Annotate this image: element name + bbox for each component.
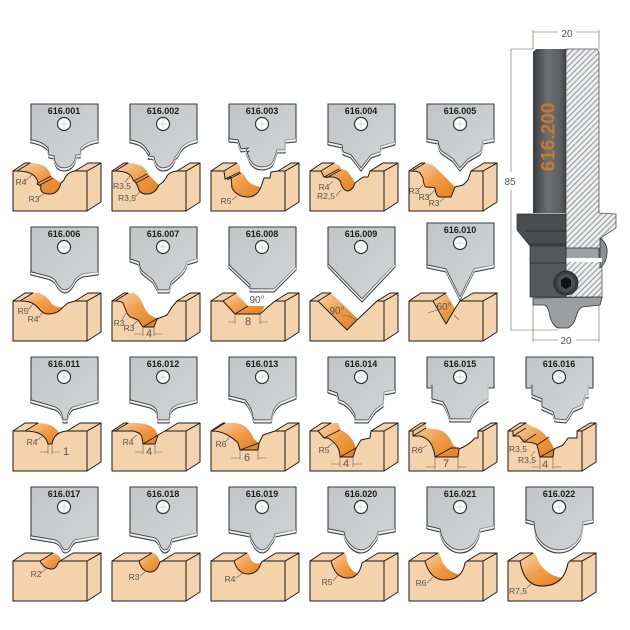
cutter card 616.014: 616.014 [345, 359, 377, 369]
wood profile 616.002: R3,5 [118, 193, 136, 203]
wood profile 616.004 [310, 163, 398, 211]
item 616.011 [13, 357, 101, 471]
wood profile 616.001 [13, 163, 101, 211]
item 616.001 [13, 104, 101, 211]
wood profile 616.011: 1 [63, 446, 69, 458]
item 616.021 [409, 487, 497, 601]
wood profile 616.014: R5 [319, 445, 330, 455]
item 616.014 [310, 357, 398, 471]
wood profile 616.012: R4 [123, 437, 134, 447]
wood profile 616.016: 4 [542, 459, 548, 471]
wood profile 616.003: R5 [221, 196, 232, 206]
wood profile 616.015: 7 [443, 458, 449, 470]
wood profile 616.011: R4 [27, 437, 38, 447]
wood profile 616.020: R5 [322, 577, 333, 587]
wood profile 616.016: R3,5 [509, 444, 527, 454]
wood profile 616.017: R2 [31, 569, 42, 579]
wood profile 616.015: R6 [412, 445, 423, 455]
cutter card 616.020: 616.020 [345, 489, 377, 499]
item 616.020 [310, 487, 398, 601]
wood profile 616.005 [409, 163, 497, 211]
cutter card 616.015: 616.015 [444, 359, 476, 369]
wood profile 616.006 [13, 293, 101, 341]
item 616.005 [409, 104, 497, 211]
item 616.010 [409, 223, 497, 341]
item 616.002 [112, 104, 200, 211]
side knob and pin [566, 238, 607, 268]
dimension: height 85 [504, 49, 558, 330]
cutter card 616.010: 616.010 [444, 225, 476, 235]
item 616.013 [211, 357, 299, 471]
wood profile 616.007: R3 [124, 323, 135, 333]
item 616.004 [310, 104, 398, 211]
wood profile 616.014: 4 [343, 458, 349, 470]
cutter card 616.018: 616.018 [147, 489, 179, 499]
cutter card 616.004: 616.004 [345, 106, 377, 116]
wood profile 616.002 [112, 163, 200, 211]
wood profile 616.001: R4 [16, 177, 27, 187]
dimension: bottom width 20 [533, 305, 599, 347]
item 616.018 [112, 487, 200, 601]
wood profile 616.019: R4 [225, 574, 236, 584]
item 616.017 [13, 487, 101, 601]
model number on shank: 616.200 [538, 103, 560, 171]
wood profile 616.001: R3 [29, 194, 40, 204]
wood profile 616.022: R7,5 [509, 586, 527, 596]
wood profile 616.006: R5 [18, 306, 29, 316]
wood profile 616.007: 4 [146, 328, 152, 340]
cutter card 616.005: 616.005 [444, 106, 476, 116]
wood profile 616.007: R3 [114, 318, 125, 328]
cutter card 616.003: 616.003 [246, 106, 278, 116]
item 616.022 [508, 487, 596, 601]
item 616.007 [112, 227, 200, 341]
cutter card 616.013: 616.013 [246, 359, 278, 369]
cutter card 616.011: 616.011 [48, 359, 80, 369]
wood profile 616.005: R3 [429, 198, 440, 208]
item 616.009 [310, 227, 398, 341]
wood profile 616.012: 4 [146, 446, 152, 458]
cutter card 616.017: 616.017 [48, 489, 80, 499]
item 616.003 [211, 104, 299, 211]
item 616.012 [112, 357, 200, 471]
wood profile 616.005: R3 [419, 192, 430, 202]
wood profile 616.008: 90° [249, 295, 265, 306]
wood profile 616.016: R3,5 [518, 455, 536, 465]
cutter card 616.021: 616.021 [444, 489, 476, 499]
wood profile 616.004: R2,5 [317, 191, 335, 201]
wood profile 616.018: R3 [129, 572, 140, 582]
item 616.006 [13, 227, 101, 341]
cutter card 616.002: 616.002 [147, 106, 179, 116]
cutting knife [533, 297, 602, 328]
item 616.008 [211, 227, 299, 341]
wood profile 616.008 [211, 293, 299, 341]
cutter card 616.012: 616.012 [147, 359, 179, 369]
cutter card 616.016: 616.016 [543, 359, 575, 369]
screw [554, 271, 578, 295]
wood profile 616.013: R6 [216, 439, 227, 449]
wood profile 616.012 [112, 423, 200, 471]
cutter card 616.008: 616.008 [246, 229, 278, 239]
wood profile 616.002: R3,5 [113, 181, 131, 191]
wood profile 616.007 [112, 293, 200, 341]
collar and lower body [517, 214, 566, 297]
wood profile 616.010: 60° [436, 302, 452, 313]
item 616.015 [409, 357, 497, 471]
dimension: height 85: 85 [504, 177, 516, 188]
wood profile 616.009: 90° [329, 306, 345, 317]
wood profile 616.008: 8 [245, 316, 251, 328]
cutter card 616.019: 616.019 [246, 489, 278, 499]
wood profile 616.005: R3 [409, 186, 420, 196]
wood profile 616.004: R4 [319, 182, 330, 192]
cutter card 616.006: 616.006 [48, 229, 80, 239]
hatched right half of bit [566, 49, 616, 297]
dimension: bottom width 20: 20 [560, 336, 572, 347]
dimension: top width 20 [533, 29, 599, 49]
item 616.019 [211, 487, 299, 601]
cutter card 616.022: 616.022 [543, 489, 575, 499]
cutter card 616.001: 616.001 [48, 106, 80, 116]
wood profile 616.021: R6 [416, 578, 427, 588]
wood profile 616.013: 6 [244, 452, 250, 464]
wood profile 616.015 [409, 423, 497, 471]
cutter card 616.009: 616.009 [345, 229, 377, 239]
shank [533, 49, 566, 213]
wood profile 616.014 [310, 423, 398, 471]
wood profile 616.006: R4 [28, 314, 39, 324]
dimension: top width 20: 20 [561, 29, 573, 40]
wood profile 616.016 [508, 423, 596, 471]
wood profile 616.011 [13, 423, 101, 471]
item 616.016 [508, 357, 596, 471]
router bit 616.200 cross-section [504, 29, 616, 347]
wood profile 616.013 [211, 423, 299, 471]
cutter card 616.007: 616.007 [147, 229, 179, 239]
